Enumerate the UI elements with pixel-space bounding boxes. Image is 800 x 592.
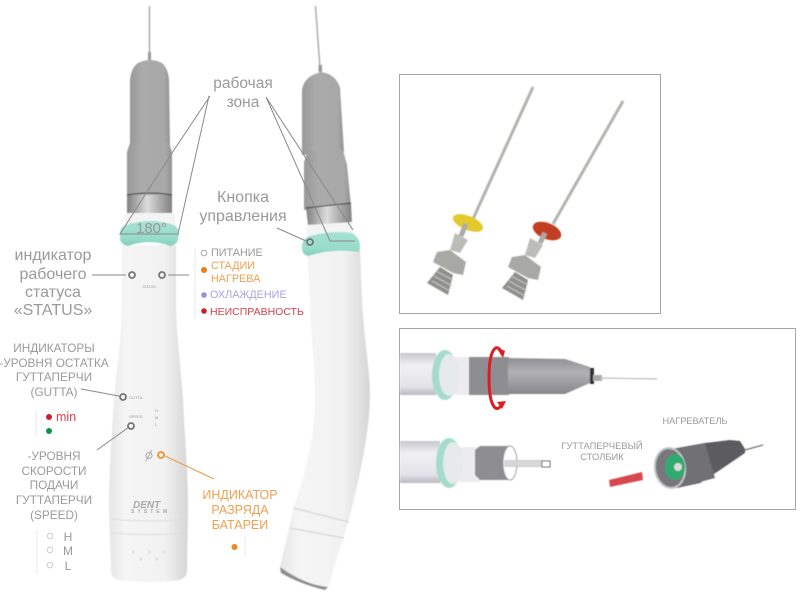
- text: status indicator: [14, 247, 92, 319]
- text: speed indicators: ПОДАЧИ: [30, 478, 78, 492]
- status legend: СТАДИИ: [211, 260, 255, 272]
- callout rings: [120, 239, 313, 458]
- handpiece small markings: SYSTEM: [131, 509, 167, 515]
- handpiece small markings: SPEED: [129, 414, 143, 419]
- handpiece front view: [109, 6, 188, 582]
- status legend: [195, 247, 304, 319]
- label: heater: НАГРЕВАТЕЛЬ: [662, 416, 728, 426]
- handpiece small markings: M: [155, 415, 158, 420]
- tip with yellow stop: [427, 87, 533, 295]
- panel: tips: [400, 74, 660, 314]
- label: gutta-percha stick: ГУТТАПЕРЧЕВЫЙ: [561, 440, 643, 451]
- speed legend: L: [65, 559, 72, 573]
- label: gutta-percha stick: [561, 440, 643, 462]
- text: gutta indicators: ГУТТАПЕРЧИ: [16, 370, 92, 384]
- heading: working zone: рабочая: [213, 75, 273, 92]
- handpiece small markings: H: [155, 408, 158, 413]
- handpiece side view: [280, 6, 370, 590]
- text: gutta indicators: -УРОВНЯ ОСТАТКА: [0, 356, 109, 370]
- text: gutta indicators: [0, 341, 109, 399]
- heading: working zone: [213, 75, 273, 111]
- text: status indicator: рабочего: [19, 266, 87, 283]
- handpiece small markings: DENT: [133, 500, 161, 511]
- speed legend: M: [63, 544, 73, 558]
- text: speed indicators: ГУТТАПЕРЧИ: [16, 493, 92, 507]
- gutta legend: min: [56, 410, 76, 424]
- text: speed indicators: -УРОВНЯ: [27, 449, 81, 463]
- text: gutta indicators: ИНДИКАТОРЫ: [13, 341, 95, 355]
- orange line: [165, 456, 214, 479]
- heading: control button: управления: [199, 208, 287, 225]
- handpiece small markings: STATUS: [142, 285, 156, 289]
- battery legend: [232, 537, 245, 556]
- status legend: ПИТАНИЕ: [211, 247, 263, 259]
- assembled handpiece: [400, 350, 657, 400]
- status legend: ОХЛАЖДЕНИЕ: [210, 289, 287, 301]
- text: battery indicator: РАЗРЯДА: [211, 503, 269, 517]
- panel: assembly: [400, 328, 796, 510]
- text: speed indicators: СКОРОСТИ: [21, 464, 87, 478]
- text: battery indicator: [202, 488, 278, 532]
- heater: [652, 440, 763, 490]
- rotation arrow: [489, 347, 506, 409]
- text: status indicator: «STATUS»: [14, 302, 92, 319]
- status legend: НАГРЕВА: [211, 273, 261, 285]
- status legend: НЕИСПРАВНОСТЬ: [210, 306, 304, 318]
- handpiece small markings: GUTTA: [129, 395, 143, 400]
- text: status indicator: индикатор: [15, 247, 92, 264]
- speed legend: [37, 530, 73, 574]
- text: speed indicators: [16, 449, 92, 522]
- speed legend: H: [64, 530, 72, 544]
- gutta-percha stick: [609, 472, 643, 487]
- text: speed indicators: (SPEED): [30, 508, 78, 522]
- 180 degree label: 180°: [136, 220, 167, 237]
- heading: working zone: зона: [227, 94, 260, 111]
- text: battery indicator: ИНДИКАТОР: [202, 488, 278, 502]
- handpiece small markings: L: [155, 422, 158, 427]
- label: gutta-percha stick: СТОЛБИК: [580, 451, 624, 462]
- handpiece small markings: [129, 285, 167, 561]
- heading: control button: Кнопка: [217, 189, 269, 206]
- heading: control button: [199, 189, 287, 225]
- open handpiece: [400, 438, 550, 488]
- text: gutta indicators: (GUTTA): [31, 385, 78, 399]
- tip with red stop: [502, 101, 623, 300]
- gutta legend: [36, 410, 76, 436]
- text: battery indicator: БАТАРЕИ: [212, 518, 268, 532]
- label lines: [81, 96, 355, 450]
- text: status indicator: статуса: [25, 284, 81, 301]
